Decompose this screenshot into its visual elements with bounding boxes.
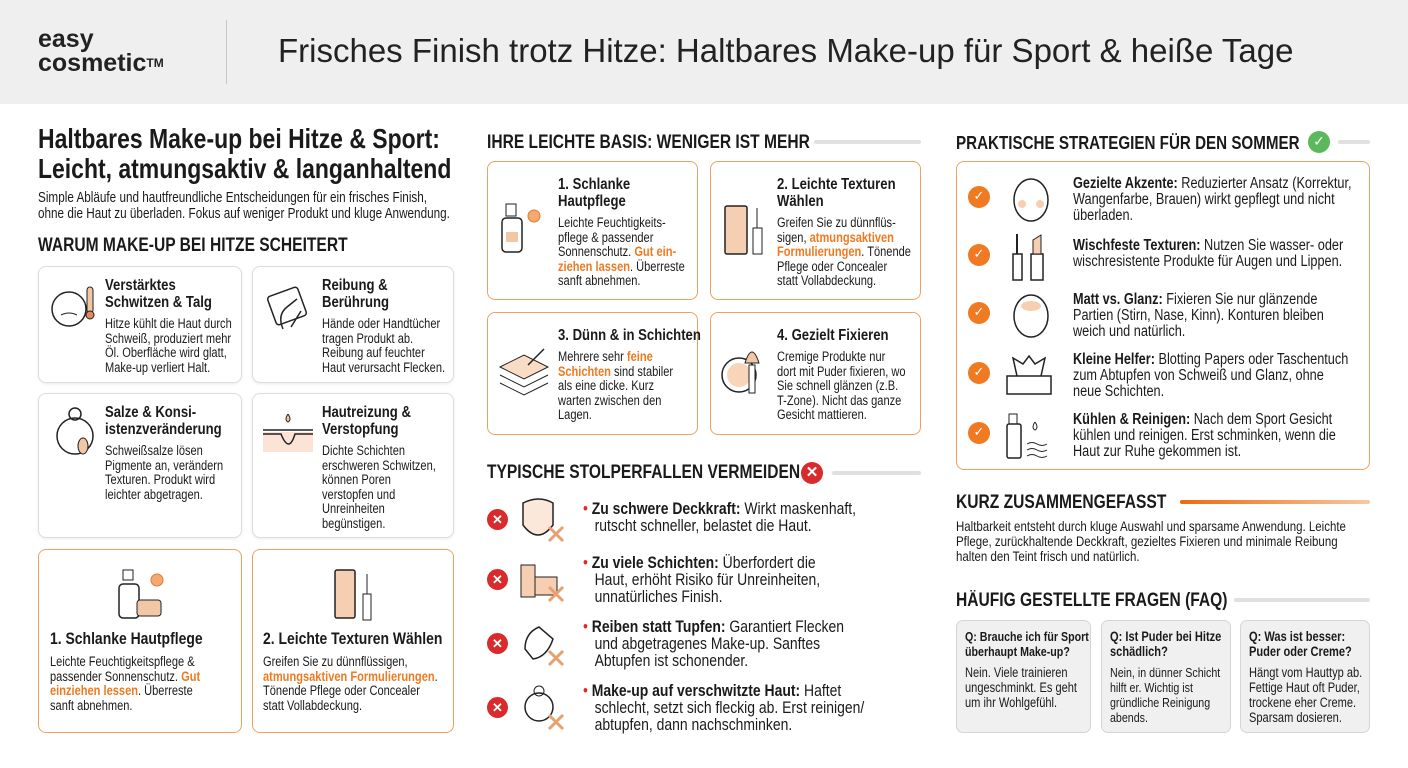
item 3 bbox=[487, 617, 844, 670]
card: salze: Schweißsalze lösen bbox=[105, 443, 203, 458]
item 1 bbox=[487, 498, 856, 542]
left column intro: Simple Abläufe und hautfreundliche Entscheidungen für ein frisches Finish, bbox=[38, 190, 427, 206]
row 3: Partien (Stirn, Nase, Kinn). Konturen bleiben bbox=[1073, 307, 1324, 324]
item 2: • Zu viele Schichten: Überfordert die bbox=[583, 553, 816, 572]
item 3: • Reiben statt Tupfen: Garantiert Flecken bbox=[583, 617, 844, 636]
card: hautreizung: begünstigen. bbox=[322, 516, 385, 530]
item 2 bbox=[487, 553, 820, 606]
basis card 4: Cremige Produkte nur bbox=[777, 349, 885, 364]
row 3: ✓ bbox=[974, 305, 984, 320]
row 1: ✓ bbox=[974, 189, 984, 204]
card: salze: istenzveränderung bbox=[105, 421, 222, 438]
item 3: und abgetragenes Make-up. Sanftes bbox=[595, 634, 820, 653]
item 1: ✕ bbox=[492, 512, 503, 527]
basis card 4: dort mit Puder fixieren, wo bbox=[777, 364, 906, 378]
faq card 3: Hängt vom Hauttyp ab. bbox=[1249, 665, 1362, 680]
card: salze: Salze & Konsi- bbox=[105, 404, 196, 421]
card bottom: leichte texturen: Greifen Sie zu dünnflüssigen, bbox=[263, 654, 408, 669]
basis card 1: pflege & passender bbox=[558, 230, 653, 244]
basis card 2: Greifen Sie zu dünnflüs- bbox=[777, 215, 896, 230]
item 1: rutscht schneller, belastet die Haut. bbox=[595, 516, 812, 535]
basis card 3: warten zwischen den bbox=[558, 392, 661, 408]
basis card 2: sigen, atmungsaktiven bbox=[777, 230, 894, 244]
item 3: Abtupfen ist schonender. bbox=[595, 651, 748, 670]
basis card 2: 2. Leichte Texturen bbox=[777, 176, 896, 193]
left column intro bbox=[38, 123, 451, 222]
icon: red x bbox=[801, 462, 823, 484]
faq card 3: Sparsam dosieren. bbox=[1249, 710, 1342, 725]
logo: easy bbox=[38, 25, 94, 53]
faq card 1: ungeschminkt. Es geht bbox=[965, 680, 1077, 695]
faq card 1: überhaupt Make-up? bbox=[965, 644, 1070, 659]
faq card 2: gründliche Reinigung bbox=[1110, 695, 1210, 710]
item 2: Haut, erhöht Risiko für Unreinheiten, bbox=[595, 570, 820, 589]
card: hautreizung: verstopfen und bbox=[322, 486, 395, 502]
card: reibung: Hände oder Handtücher bbox=[322, 316, 440, 331]
card: hautreizung: Unreinheiten bbox=[322, 501, 385, 516]
card bottom: leichte texturen bbox=[252, 549, 454, 733]
card: schwitzen: Schwitzen & Talg bbox=[105, 294, 212, 311]
item 2: unnatürliches Finish. bbox=[595, 587, 722, 606]
list: stolperfallen bbox=[487, 498, 864, 734]
icon: red x: ✕ bbox=[806, 464, 818, 481]
card: salze: Pigmente an, verändern bbox=[105, 458, 223, 472]
basis card 3: Schichten sind stabiler bbox=[558, 364, 673, 378]
card: schwitzen: Schweiß, produziert mehr bbox=[105, 330, 231, 346]
basis card 4: Gesicht mattieren. bbox=[777, 407, 867, 422]
faq card 1: um ihr Wohlgefühl. bbox=[965, 695, 1057, 710]
row 2: wischresistente Produkte für Augen und Lippen. bbox=[1073, 253, 1342, 270]
card: hautreizung: Hautreizung & bbox=[322, 404, 411, 421]
icon: green check bbox=[1308, 131, 1330, 153]
left column intro: Leicht, atmungsaktiv & langanhaltend bbox=[38, 153, 451, 184]
faq card 3: trockene eher Creme. bbox=[1249, 695, 1356, 710]
card bottom: leichte texturen: statt Vollabdeckung. bbox=[263, 698, 362, 712]
logo: cosmeticTM bbox=[38, 49, 164, 77]
row 2 bbox=[968, 234, 1343, 281]
item 2: ✕ bbox=[492, 572, 503, 587]
basis card 4: T-Zone). Nicht das ganze bbox=[777, 392, 901, 408]
left column intro: Haltbares Make-up bei Hitze & Sport: bbox=[38, 123, 440, 154]
row 4: zum Abtupfen von Schweiß und Glanz, ohne bbox=[1073, 367, 1324, 384]
row 3: weich und natürlich. bbox=[1073, 323, 1185, 340]
card: salze: leichter abgetragen. bbox=[105, 486, 203, 502]
card bottom: schlanke hautpflege: Leichte Feuchtigkeitspflege & bbox=[50, 654, 195, 669]
faq card 2 bbox=[1101, 620, 1231, 733]
faq card 2: Q: Ist Puder bei Hitze bbox=[1110, 629, 1221, 644]
basis card 3: als eine dicke. Kurz bbox=[558, 378, 654, 393]
row 1: überladen. bbox=[1073, 207, 1133, 224]
card: schwitzen: Hitze kühlt die Haut durch bbox=[105, 316, 232, 331]
row 1: Wangenfarbe, Brauen) wirkt gepflegt und nicht bbox=[1073, 191, 1335, 208]
basis card 1: sanft abnehmen. bbox=[558, 273, 640, 288]
row 5 bbox=[968, 411, 1336, 460]
faq card 1: Nein. Viele trainieren bbox=[965, 665, 1068, 680]
row 3: Matt vs. Glanz: Fixieren Sie nur glänzende bbox=[1073, 291, 1317, 308]
card: hautreizung: erschweren Schwitzen, bbox=[322, 458, 436, 472]
row 4: neue Schichten. bbox=[1073, 383, 1164, 400]
item 4: schlecht, setzt sich fleckig ab. Erst reinigen/ bbox=[595, 698, 864, 717]
item 1: • Zu schwere Deckkraft: Wirkt maskenhaft, bbox=[583, 499, 856, 518]
card bottom: schlanke hautpflege: einziehen lessen. Überreste bbox=[50, 683, 193, 698]
faq card 2: Nein, in dünner Schicht bbox=[1110, 665, 1220, 680]
icon: green check: ✓ bbox=[1313, 134, 1325, 150]
basis card 2: Pflege oder Concealer bbox=[777, 258, 887, 274]
basis card 3: 3. Dünn & in Schichten bbox=[558, 327, 701, 344]
left column intro: ohne die Haut zu überladen. Fokus auf weniger Produkt und kluge Anwendung. bbox=[38, 206, 450, 222]
card: schwitzen: Öl. Oberfläche wird glatt, bbox=[105, 345, 227, 360]
faq card 3: Q: Was ist besser: bbox=[1249, 629, 1345, 644]
basis card 4 bbox=[710, 312, 921, 435]
card: reibung: Haut verursacht Flecken. bbox=[322, 360, 445, 374]
card bottom: schlanke hautpflege: 1. Schlanke Hautpflege bbox=[50, 629, 203, 648]
basis card 1: ziehen lassen. Überreste bbox=[558, 258, 685, 274]
heading: warum: WARUM MAKE-UP BEI HITZE SCHEITERT bbox=[38, 235, 348, 256]
basis card 1: Sonnenschutz. Gut ein- bbox=[558, 244, 676, 259]
card: hautreizung: können Poren bbox=[322, 472, 391, 487]
basis card 1: 1. Schlanke bbox=[558, 176, 630, 193]
main title: Frisches Finish trotz Hitze: Haltbares Make-up für Sport & heiße Tage bbox=[278, 32, 1293, 69]
card bottom: schlanke hautpflege: sanft abnehmen. bbox=[50, 698, 132, 712]
card: salze bbox=[38, 393, 242, 538]
faq card 3: Puder oder Creme? bbox=[1249, 644, 1352, 659]
card bottom: schlanke hautpflege bbox=[38, 549, 242, 733]
card: hautreizung: Verstopfung bbox=[322, 421, 399, 438]
row 5: Haut zur Ruhe gekommen ist. bbox=[1073, 443, 1241, 460]
item 4: abtupfen, dann nachschminken. bbox=[595, 715, 792, 734]
card: hautreizung bbox=[252, 393, 454, 538]
heading: kurz zusammengefasst: KURZ ZUSAMMENGEFASST bbox=[956, 492, 1166, 513]
faq card 1: Q: Brauche ich für Sport bbox=[965, 629, 1089, 644]
card: schwitzen: Verstärktes bbox=[105, 277, 176, 294]
row 4: Kleine Helfer: Blotting Papers oder Taschentuch bbox=[1073, 351, 1348, 368]
card: reibung bbox=[252, 266, 454, 383]
card: schwitzen: Make-up verliert Halt. bbox=[105, 360, 210, 374]
card: salze: Texturen. Produkt wird bbox=[105, 472, 215, 487]
card bottom: leichte texturen: Tönende Pflege oder Concealer bbox=[263, 683, 420, 698]
logo bbox=[38, 25, 164, 77]
faq card 1 bbox=[956, 620, 1091, 733]
basis card 3: Lagen. bbox=[558, 407, 592, 422]
card: reibung: Reibung auf feuchter bbox=[322, 345, 425, 360]
text: summary: halten den Teint frisch und natürlich. bbox=[956, 548, 1140, 564]
text: summary: Haltbarkeit entsteht durch kluge Auswahl und sparsame Anwendung. Leichte bbox=[956, 518, 1346, 534]
row 3 bbox=[968, 291, 1324, 340]
card: reibung: Reibung & bbox=[322, 277, 388, 294]
row 5: Kühlen & Reinigen: Nach dem Sport Gesicht bbox=[1073, 411, 1332, 428]
row 5: kühlen und reinigen. Erst schminken, wenn die bbox=[1073, 427, 1336, 444]
heading: leichte basis: IHRE LEICHTE BASIS: WENIGER IST MEHR bbox=[487, 132, 810, 153]
faq card 2: schädlich? bbox=[1110, 644, 1168, 659]
heading: stolperfallen: TYPISCHE STOLPERFALLEN VERMEIDEN bbox=[487, 462, 800, 483]
basis card 1 bbox=[487, 161, 698, 300]
basis card 1: Leichte Feuchtigkeits- bbox=[558, 215, 666, 230]
text: summary: Pflege, zurückhaltende Deckkraft, gezieltes Fixieren und minimale Reibung bbox=[956, 533, 1338, 549]
basis card 1: Hautpflege bbox=[558, 193, 626, 210]
row 2: ✓ bbox=[974, 247, 984, 262]
basis card 2: Formulierungen. Tönende bbox=[777, 244, 911, 259]
row 1: Gezielte Akzente: Reduzierter Ansatz (Korrektur, bbox=[1073, 175, 1352, 192]
basis card 2 bbox=[710, 161, 921, 300]
row 4 bbox=[968, 351, 1348, 400]
row 5: ✓ bbox=[974, 425, 984, 440]
row 2: Wischfeste Texturen: Nutzen Sie wasser- oder bbox=[1073, 237, 1343, 254]
card bottom: leichte texturen: 2. Leichte Texturen Wählen bbox=[263, 629, 442, 648]
card bottom: schlanke hautpflege: passender Sonnenschutz. Gut bbox=[50, 668, 200, 684]
card: reibung: Berührung bbox=[322, 294, 389, 311]
card bottom: leichte texturen: atmungsaktiven Formulierungen. bbox=[263, 668, 438, 684]
row 1 bbox=[968, 175, 1352, 224]
text: summary bbox=[956, 518, 1346, 564]
basis card 4: 4. Gezielt Fixieren bbox=[777, 327, 889, 344]
basis card 3 bbox=[487, 312, 698, 435]
item 4: ✕ bbox=[492, 700, 503, 715]
card: schwitzen bbox=[38, 266, 242, 383]
item 4 bbox=[487, 681, 864, 734]
item 3: ✕ bbox=[492, 636, 503, 651]
card: hautreizung: Dichte Schichten bbox=[322, 443, 405, 458]
item 4: • Make-up auf verschwitzte Haut: Haftet bbox=[583, 681, 841, 700]
header bar bbox=[0, 0, 1408, 104]
basis card 4: Sie schnell glänzen (z.B. bbox=[777, 378, 898, 393]
row 4: ✓ bbox=[974, 365, 984, 380]
faq card 2: hilft er. Wichtig ist bbox=[1110, 680, 1193, 695]
panel: strategien bbox=[956, 161, 1370, 470]
faq card 2: abends. bbox=[1110, 710, 1148, 725]
heading: strategien: PRAKTISCHE STRATEGIEN FÜR DEN SOMMER bbox=[956, 132, 1300, 153]
basis card 3: Mehrere sehr feine bbox=[558, 349, 653, 364]
faq card 3 bbox=[1240, 620, 1370, 733]
card: reibung: tragen Produkt ab. bbox=[322, 330, 413, 346]
basis card 2: statt Vollabdeckung. bbox=[777, 273, 876, 288]
heading: faq: HÄUFIG GESTELLTE FRAGEN (FAQ) bbox=[956, 590, 1227, 611]
basis card 2: Wählen bbox=[777, 193, 824, 210]
faq card 3: Fettige Haut oft Puder, bbox=[1249, 680, 1360, 695]
